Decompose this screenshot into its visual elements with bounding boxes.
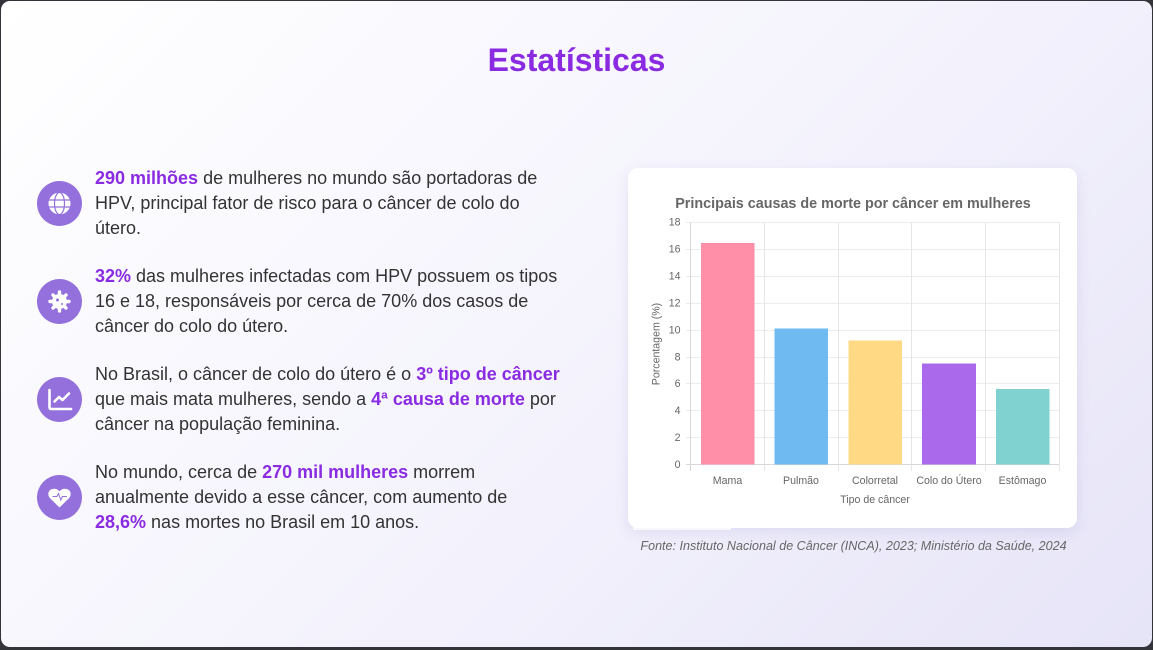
source note: Fonte: Instituto Nacional de Câncer (INCA), 2023; Ministério da Saúde, 2024 — [640, 539, 1067, 553]
y axis labels: 0 — [675, 459, 681, 471]
y axis labels — [669, 216, 681, 471]
y axis title: Porcentagem (%) — [650, 303, 662, 385]
stat row: 290 million — [37, 168, 537, 238]
x axis labels — [713, 474, 1046, 487]
icon: globe — [37, 181, 82, 226]
text: 32 percent: 16 e 18, responsáveis por cerca de 70% dos casos de — [95, 291, 528, 311]
bar: Colo do Útero — [922, 364, 976, 464]
bar: Estômago — [996, 389, 1050, 464]
y axis labels: 10 — [669, 324, 681, 336]
chart title: Principais causas de morte por câncer em mulheres — [675, 196, 1031, 212]
text: 290 million: HPV, principal fator de risco para o câncer de colo do — [95, 193, 520, 213]
title: Estatísticas — [488, 42, 665, 78]
text: 290 million — [95, 168, 537, 238]
text: worldwide deaths: 28,6% nas mortes no Brasil em 10 anos. — [95, 512, 419, 532]
y axis labels: 6 — [675, 378, 681, 390]
stat row: worldwide deaths — [37, 462, 507, 532]
y axis labels: 14 — [669, 270, 681, 282]
x axis labels: Mama — [713, 475, 742, 487]
y axis labels: 16 — [669, 244, 681, 256]
bar: Colorretal — [848, 340, 902, 464]
text: Brazil ranking: que mais mata mulheres, sendo a 4ª causa de morte por — [95, 389, 556, 409]
x axis title: Tipo de câncer — [840, 494, 910, 506]
y axis labels: 8 — [675, 352, 681, 364]
text: 32 percent: câncer do colo do útero. — [95, 316, 288, 336]
x axis labels: Estômago — [999, 475, 1046, 487]
stat row: Brazil ranking — [37, 364, 560, 434]
stat row: 32 percent — [37, 266, 557, 336]
bars — [701, 243, 1050, 464]
x axis labels: Colo do Útero — [916, 474, 982, 487]
y axis labels: 18 — [669, 216, 681, 228]
chart card — [628, 168, 1077, 528]
y axis labels: 2 — [675, 432, 681, 444]
text: 290 million: 290 milhões de mulheres no mundo são portadoras de — [95, 168, 537, 188]
bar chart — [650, 196, 1060, 506]
text: worldwide deaths — [95, 462, 507, 532]
bar: Pulmão — [774, 328, 828, 464]
text: 32 percent — [95, 266, 557, 336]
bar: Mama — [701, 243, 754, 464]
y axis labels: 12 — [669, 298, 681, 310]
icon: heartbeat — [37, 475, 82, 520]
text: Brazil ranking — [95, 364, 560, 434]
text: Brazil ranking: câncer na população feminina. — [95, 414, 340, 434]
text: 290 million: útero. — [95, 218, 141, 238]
text: worldwide deaths: No mundo, cerca de 270 mil mulheres morrem — [95, 462, 475, 482]
text: Brazil ranking: No Brasil, o câncer de colo do útero é o 3º tipo de câncer — [95, 364, 560, 384]
x axis labels: Pulmão — [783, 475, 819, 487]
text: worldwide deaths: anualmente devido a esse câncer, com aumento de — [95, 487, 507, 507]
y axis labels: 4 — [675, 405, 681, 417]
x axis labels: Colorretal — [852, 475, 898, 487]
icon: virus — [37, 279, 82, 324]
icon: line chart — [37, 377, 82, 422]
text: 32 percent: 32% das mulheres infectadas com HPV possuem os tipos — [95, 266, 557, 286]
